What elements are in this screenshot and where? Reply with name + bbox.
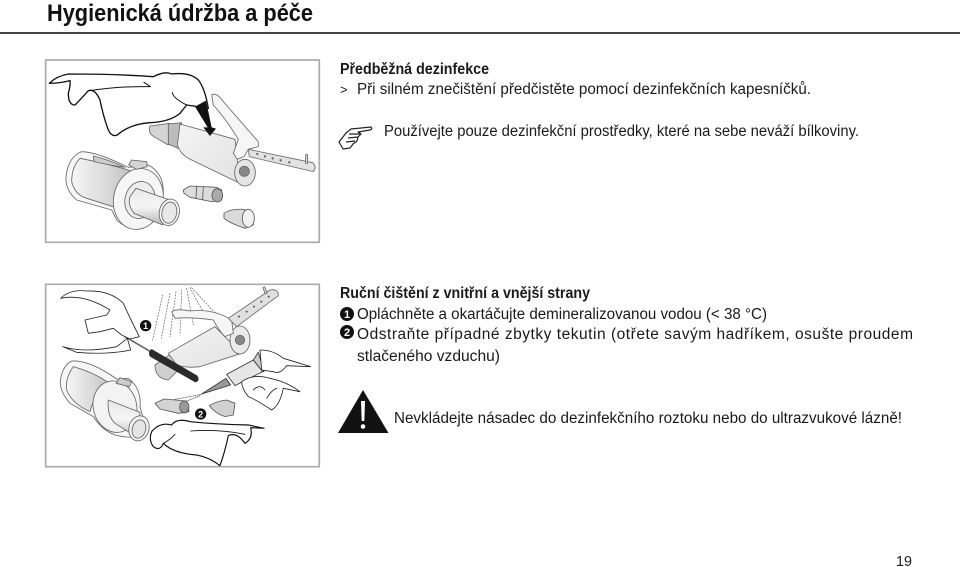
icon: pointing hand <box>339 127 372 149</box>
cloth <box>150 420 264 466</box>
left hand <box>61 291 139 353</box>
panel: pre-disinfection illustration <box>46 60 319 242</box>
step 1: Opláchněte a okartáčujte demineralizovanou vodou (< 38 °C) <box>357 306 767 323</box>
brush <box>125 337 152 352</box>
right hand <box>242 350 311 410</box>
step 2: Odstraňte případné zbytky tekutin (otřete savým hadříkem, osušte proudem <box>357 326 913 343</box>
icon: warning triangle <box>338 390 388 433</box>
title: Hygienická údržba a péče <box>47 0 313 27</box>
badge 2 <box>195 408 206 420</box>
badge 2: 2 <box>198 409 203 419</box>
large nozzle <box>66 152 182 234</box>
air gun <box>202 352 264 394</box>
badge 1 <box>140 320 151 331</box>
handpiece body <box>149 94 315 186</box>
panel: manual cleaning illustration <box>46 284 319 467</box>
bullet text: > <box>340 82 348 97</box>
note text: Používejte pouze dezinfekční prostředky, které na sebe neváží bílkoviny. <box>384 123 859 140</box>
heading: manual cleaning: Ruční čištění z vnitřní a vnější strany <box>340 285 590 302</box>
heading: pre-disinfection: Předběžná dezinfekce <box>340 61 489 78</box>
header rule <box>0 32 960 34</box>
warning text: Nevkládejte násadec do dezinfekčního roztoku nebo do ultrazvukové lázně! <box>394 410 902 427</box>
water spray <box>153 288 220 340</box>
cloth <box>49 73 208 136</box>
step 2 <box>340 325 913 365</box>
handpiece <box>155 287 278 380</box>
arrow <box>195 101 216 136</box>
small parts <box>183 186 254 228</box>
small parts <box>155 399 235 417</box>
step 2: stlačeného vzduchu) <box>357 348 500 365</box>
step 2: 2 <box>344 327 350 339</box>
large nozzle <box>60 361 152 443</box>
step 1: 1 <box>344 309 350 321</box>
bullet text: Při silném znečištění předčistěte pomocí dezinfekčních kapesníčků. <box>357 81 811 98</box>
badge 1: 1 <box>143 321 148 331</box>
